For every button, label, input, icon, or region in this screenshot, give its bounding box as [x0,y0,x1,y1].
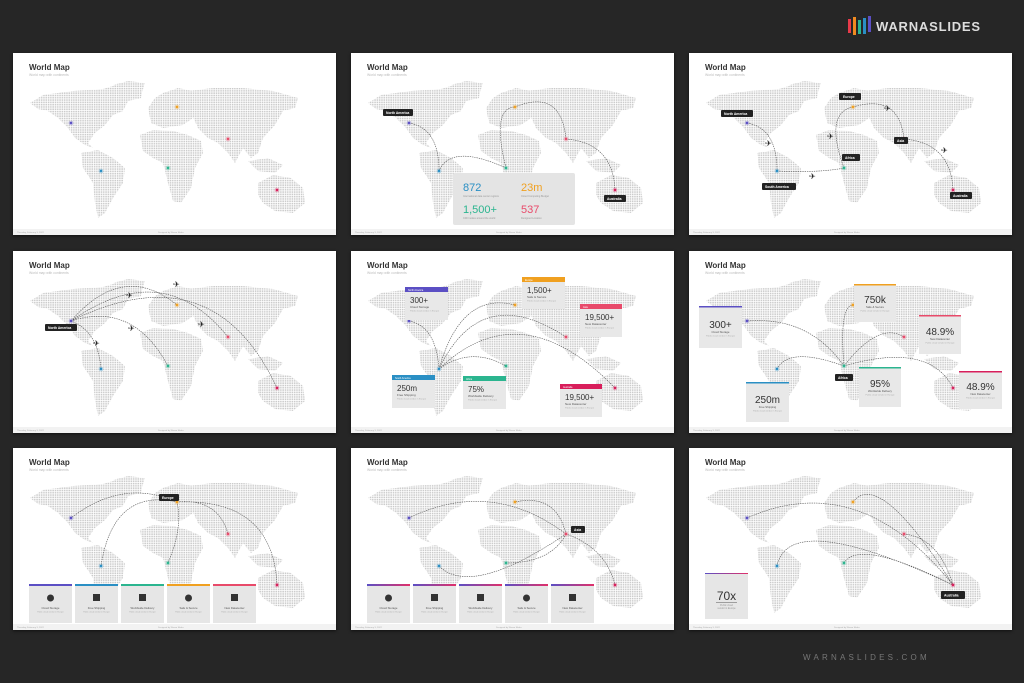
slide 7: routes from Europe with feature cards: Public cloud vendor in Europe [83,612,111,614]
slide 5: stat cards from South America: New Datacenter [585,322,607,326]
slide 4: flights from North America: ✈ [173,280,180,289]
slide 8: routes from Asia with feature cards: Asia [574,528,581,532]
slide 5: stat cards from South America: 19,500+ [585,313,614,322]
slide 8: routes from Asia with feature cards: Public cloud vendor in Europe [375,612,403,614]
slide 8: routes from Asia with feature cards: New Datacenter [562,606,583,610]
slide 5: stat cards from South America: 19,500+ [565,393,594,402]
slide 6: stat cards from Africa: Cloud Storage [712,330,730,334]
slide 7: routes from Europe with feature cards: Worldwide Delivery [131,606,155,610]
slide 6: stat cards from Africa [689,251,1012,433]
slide 4: flights from North America: North America [48,326,71,330]
slide 8: routes from Asia with feature cards: Worldwide Delivery [469,606,493,610]
slide 8: routes from Asia with feature cards: Public cloud vendor in Europe [421,612,449,614]
slide 4: flights from North America: ✈ [198,320,205,329]
slide 2: route with stats box [351,53,674,235]
slide 5: stat cards from South America: Worldwide Delivery [468,394,494,398]
slide 2: route with stats box: International data center regions [463,195,500,198]
slide 2: route with stats box: 23m [521,182,542,194]
slide 3: flight route with labels: South America [765,185,789,189]
slide 7: routes from Europe with feature cards: Europe [162,496,174,500]
slide 2: route with stats box: North America [386,111,409,115]
slide 2: route with stats box: 537 [521,204,539,216]
slide 5: stat cards from South America: 250m [397,384,417,393]
slide 3: flight route with labels: North America [724,112,747,116]
slide 5: stat cards from South America: 300+ [410,296,428,305]
slide 2: route with stats box: 872 [463,182,481,194]
slide 5: stat cards from South America: Public cloud vendor in Europe [410,310,440,312]
slide 5: stat cards from South America: Free Shipping [397,393,416,397]
slide 3: flight route with labels: ✈ [765,139,772,148]
slide 8: routes from Asia with feature cards: Free Shipping [426,606,444,610]
slide 2: route with stats box: 1,500+ [463,204,497,216]
slide 5: stat cards from South America: North America [408,289,424,292]
slide 2: route with stats box: Cloud Computing Budget [521,195,549,198]
slide 6: stat cards from Africa: Public cloud vendor in Europe [860,310,890,312]
slide 8: routes from Asia with feature cards: Cloud Storage [380,606,398,610]
slide 5: stat cards from South America: Public cloud vendor in Europe [468,398,498,402]
slide 8: routes from Asia with feature cards: Safe & Secure [517,606,536,610]
slide 6: stat cards from Africa: Public cloud vendor in Europe [865,394,895,396]
slide 6: stat cards from Africa: New Datacenter [930,337,950,341]
slide 5: stat cards from South America: Public cloud vendor in Europe [397,398,427,400]
slide 6: stat cards from Africa: 95% [870,379,890,390]
slide 5: stat cards from South America: Public cloud vendor in Europe [565,406,595,410]
slide 4: flights from North America: ✈ [126,291,133,300]
slide 9: routes to Australia with 70x card [689,448,1012,630]
slide 6: stat cards from Africa: 48.9% [966,382,995,393]
slide 9: routes to Australia with 70x card: Public cloud [720,604,734,607]
slide 6: stat cards from Africa: Public cloud vendor in Europe [753,410,783,412]
slide 7: routes from Europe with feature cards: Safe & Secure [179,606,198,610]
slide 6: stat cards from Africa: 48.9% [926,327,954,338]
slide 2: route with stats box: Australia [607,197,622,201]
slide 7: routes from Europe with feature cards: Public cloud vendor in Europe [175,612,203,614]
slide 3: flight route with labels [689,53,1012,235]
slide 9: routes to Australia with 70x card: 70x [717,589,736,603]
slide 8: routes from Asia with feature cards: Public cloud vendor in Europe [513,612,541,614]
slide 3: flight route with labels: ✈ [884,104,891,113]
slide 7: routes from Europe with feature cards: Public cloud vendor in Europe [221,612,249,614]
slide 5: stat cards from South America: Australia [563,386,573,389]
slide 8: routes from Asia with feature cards: Public cloud vendor in Europe [559,612,587,614]
slide 5: stat cards from South America: 75% [468,385,484,394]
slide 5: stat cards from South America: Asia [583,306,588,309]
slide 7: routes from Europe with feature cards: Public cloud vendor in Europe [129,612,157,614]
slide 6: stat cards from Africa: Africa [838,376,848,380]
slide 6: stat cards from Africa: Worldwide Delivery [868,389,893,393]
slide 6: stat cards from Africa: Safe & Secure [866,305,884,309]
slide 6: stat cards from Africa: 750k [864,295,887,306]
logo [848,16,981,35]
slide 7: routes from Europe with feature cards: New Datacenter [224,606,245,610]
slide 7: routes from Europe with feature cards: Cloud Storage [42,606,60,610]
slide 6: stat cards from Africa: 250m [755,395,780,406]
slide 6: stat cards from Africa: Public cloud vendor in Europe [925,342,955,344]
slide 5: stat cards from South America: Africa [466,378,473,381]
slide 6: stat cards from Africa: New Datacenter [970,392,991,396]
slide 7: routes from Europe with feature cards: Free Shipping [88,606,106,610]
slide 4: flights from North America [13,251,336,433]
slide 3: flight route with labels: Africa [845,156,855,160]
slide 5: stat cards from South America: Public cloud vendor in Europe [585,326,615,330]
slide 5: stat cards from South America: 1,500+ [527,286,552,295]
slide 3: flight route with labels: Australia [953,194,968,198]
slide 5: stat cards from South America: New Datacenter [565,402,587,406]
footer website text: WARNASLIDES.COM [803,653,930,662]
slide 6: stat cards from Africa: Free Shipping [759,405,777,409]
slide 4: flights from North America: ✈ [93,339,100,348]
slide 5: stat cards from South America: South America [395,377,411,380]
slide 8: routes from Asia with feature cards: Public cloud vendor in Europe [467,612,495,614]
slide 3: flight route with labels: ✈ [941,146,948,155]
slide 8: routes from Asia with feature cards [351,448,674,630]
slide 5: stat cards from South America: Europe [525,279,533,282]
slide 7: routes from Europe with feature cards [13,448,336,630]
slide 2: route with stats box: CDN nodes around the world [463,217,496,220]
slide 3: flight route with labels: ✈ [809,172,816,181]
slide 3: flight route with labels: Asia [897,139,904,143]
slide 1: plain map with dots [13,53,336,235]
slide 3: flight route with labels: ✈ [827,132,834,141]
slide 7: routes from Europe with feature cards: Public cloud vendor in Europe [37,612,65,614]
slide 9: routes to Australia with 70x card: vendor in Europe [717,607,736,610]
slide 5: stat cards from South America: Safe & Secure [527,295,547,299]
logo: WARNASLIDES [876,19,981,34]
slide 6: stat cards from Africa: 300+ [709,320,732,331]
slide 4: flights from North America: ✈ [128,324,135,333]
slide 9: routes to Australia with 70x card: Australia [944,594,959,598]
slide 5: stat cards from South America: Public cloud vendor in Europe [527,300,557,302]
slide 2: route with stats box: Designed Location [521,217,542,220]
slide 3: flight route with labels: Europe [843,95,855,99]
slide 5: stat cards from South America [351,251,674,433]
slide 5: stat cards from South America: Cloud Storage [410,305,430,309]
slide 6: stat cards from Africa: Public cloud vendor in Europe [706,334,736,338]
slide 6: stat cards from Africa: Public cloud vendor in Europe [966,396,996,400]
